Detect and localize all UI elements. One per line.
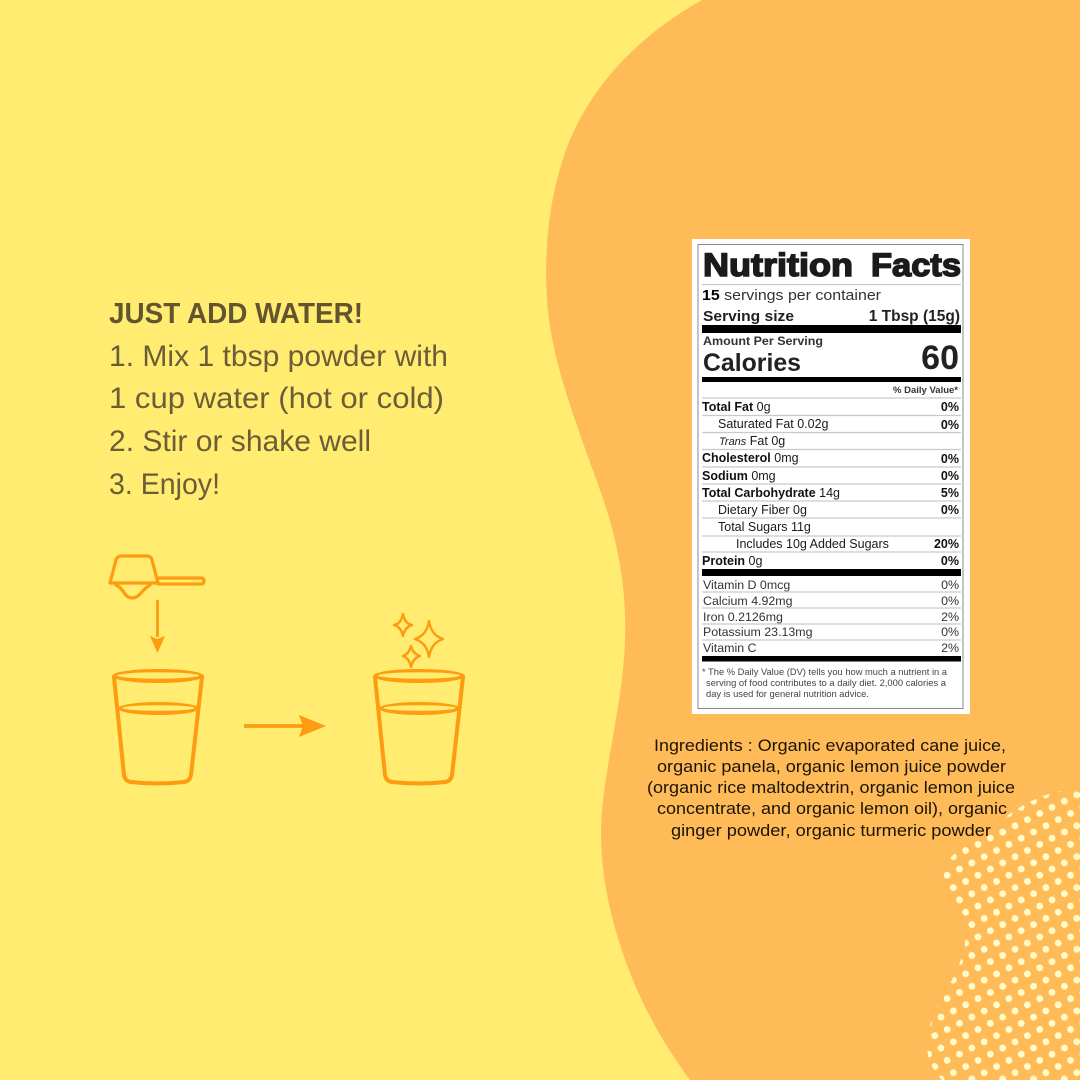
vitamin rows: Potassium 23.13mg bbox=[703, 625, 813, 639]
panel: nutrition facts label bbox=[692, 239, 970, 714]
label white background bbox=[692, 239, 970, 714]
icon: glass left bbox=[112, 669, 204, 784]
nutrient rows: Protein 0g bbox=[702, 554, 762, 568]
ingredients text block: (organic rice maltodextrin, organic lemon juice bbox=[647, 779, 1015, 797]
daily value header: % Daily Value* bbox=[893, 385, 958, 396]
ingredients text block: concentrate, and organic lemon oil), organic bbox=[657, 800, 1007, 818]
nutrition facts title: Facts bbox=[871, 247, 961, 283]
calories row: 60 bbox=[921, 339, 959, 377]
serving size row: 1 Tbsp (15g) bbox=[869, 308, 960, 325]
vitamin rows: Iron 0.2126mg bbox=[703, 610, 783, 624]
nutrient rows: Sodium 0mg bbox=[702, 469, 776, 483]
vitamin rows: Vitamin C bbox=[703, 641, 757, 655]
nutrient rows: Saturated Fat 0.02g bbox=[718, 417, 829, 431]
footnote: serving of food contributes to a daily diet. 2,000 calories a bbox=[706, 678, 947, 688]
nutrient rows: Total Carbohydrate 14g bbox=[702, 486, 840, 500]
nutrient rows: Trans Fat 0g bbox=[719, 434, 785, 448]
vitamin rows: 0% bbox=[941, 578, 959, 592]
nutrient rows: 0% bbox=[941, 469, 959, 483]
step 1 line 2: 1 cup water (hot or cold) bbox=[109, 382, 444, 415]
footnote: * The % Daily Value (DV) tells you how much a nutrient in a bbox=[702, 667, 948, 677]
nutrient rows: Total Sugars 11g bbox=[718, 520, 811, 534]
vitamin rows bbox=[702, 578, 961, 655]
footnote bbox=[702, 667, 948, 699]
heading: just add water: JUST ADD WATER! bbox=[109, 298, 363, 330]
ingredients text block: Ingredients : Organic evaporated cane juice, bbox=[654, 737, 1006, 755]
calories row: Calories bbox=[703, 349, 801, 377]
nutrient rows: 0% bbox=[941, 452, 959, 466]
nutrient rows: 0% bbox=[941, 503, 959, 517]
nutrient rows: Includes 10g Added Sugars bbox=[736, 537, 889, 551]
instructions text block bbox=[109, 298, 448, 501]
serving size row bbox=[703, 308, 960, 325]
servings per container: 15 servings per container bbox=[702, 288, 881, 304]
vitamin rows: 0% bbox=[941, 625, 959, 639]
dotted pattern blob bbox=[920, 785, 1080, 1080]
nutrition facts title: Nutrition bbox=[703, 247, 853, 283]
calories row bbox=[703, 339, 959, 377]
icon: sparkles bbox=[394, 614, 443, 667]
icon: glass right bbox=[373, 669, 465, 784]
panel: orange blob bbox=[546, 0, 1080, 1080]
serving size row: Serving size bbox=[703, 308, 794, 325]
step 2: 2. Stir or shake well bbox=[109, 425, 371, 458]
nutrient rows: 20% bbox=[934, 537, 959, 551]
arrow: scoop down to glass bbox=[150, 600, 165, 653]
nutrient rows: 0% bbox=[941, 554, 959, 568]
nutrition facts title bbox=[703, 247, 961, 283]
ingredients text block: ginger powder, organic turmeric powder bbox=[671, 822, 992, 840]
nutrient rows: 0% bbox=[941, 418, 959, 432]
arrow: left glass to right glass bbox=[244, 715, 326, 737]
nutrient rows: 5% bbox=[941, 486, 959, 500]
icon: measuring scoop bbox=[110, 556, 204, 598]
nutrient rows: Cholesterol 0mg bbox=[702, 451, 799, 465]
vitamin rows: 0% bbox=[941, 594, 959, 608]
step 3: 3. Enjoy! bbox=[109, 468, 220, 501]
vitamin rows: 2% bbox=[941, 610, 959, 624]
footnote: day is used for general nutrition advice. bbox=[706, 689, 869, 699]
label border bbox=[698, 244, 963, 708]
nutrient rows: Dietary Fiber 0g bbox=[718, 503, 807, 517]
vitamin rows: Vitamin D 0mcg bbox=[703, 578, 790, 592]
vitamin rows: 2% bbox=[941, 641, 959, 655]
nutrient rows bbox=[702, 400, 961, 568]
nutrient rows: 0% bbox=[941, 400, 959, 414]
step 1 line 1: 1. Mix 1 tbsp powder with bbox=[109, 340, 448, 373]
ingredients text block bbox=[647, 737, 1015, 840]
nutrient rows: Total Fat 0g bbox=[702, 400, 771, 414]
amount per serving: Amount Per Serving bbox=[703, 334, 823, 348]
ingredients text block: organic panela, organic lemon juice powder bbox=[657, 758, 1007, 776]
vitamin rows: Calcium 4.92mg bbox=[703, 594, 793, 608]
